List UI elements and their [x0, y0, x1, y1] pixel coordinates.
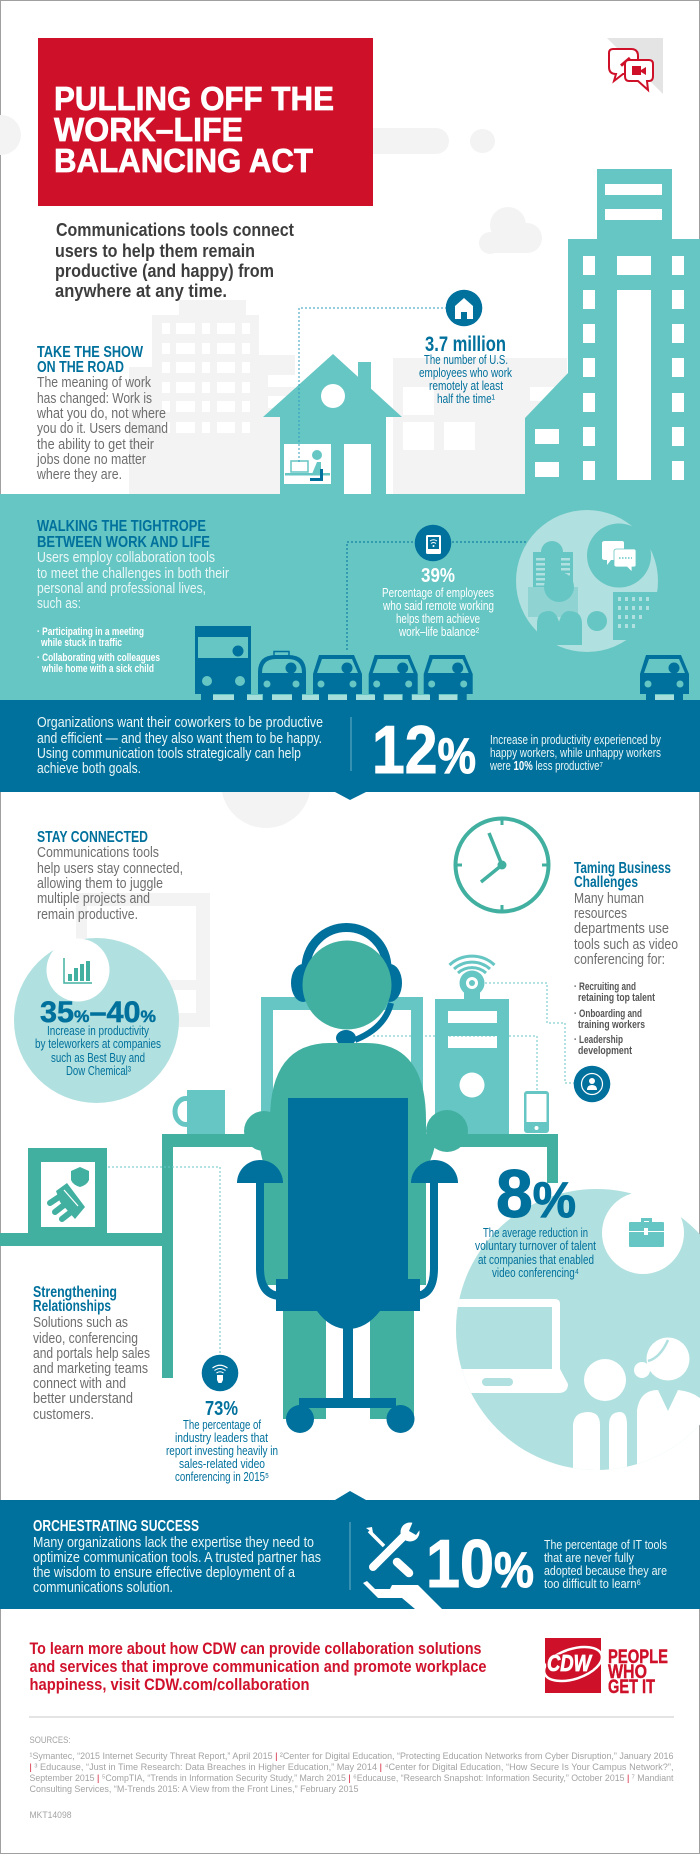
CDW logo [540, 1638, 668, 1698]
callout: 3.7 million remote employees: remotely at least [429, 378, 503, 393]
callout: 35 to 40 percent productivity circle [14, 938, 179, 1103]
panel: orchestrating success band: adopted because they are [544, 1563, 667, 1578]
dashed connectors from headset and webcam [373, 983, 574, 1090]
sources: September 2015 | ⁵CompTIA, “Trends in Information Security Study,” March 2015 | ⁶Educause, “Research Snapshot: Information Security,” October 2015 | ⁷ Mandiant [30, 1773, 674, 1784]
panel: orchestrating success band: that are never fully [544, 1550, 634, 1565]
callout: 39 percent work-life balance: helps them achieve [396, 611, 480, 626]
illustration: computer tower with webcam [435, 956, 509, 1134]
callout: 39 percent work-life balance [347, 525, 527, 650]
text: taming business challenges: Taming Business [574, 860, 671, 877]
callout: 39 percent work-life balance: Percentage of employees [382, 585, 494, 600]
text: taming business challenges: Many human [574, 890, 644, 907]
text: tightrope copy: while stuck in traffic [40, 637, 122, 649]
callout: 73 percent video conferencing: The percentage of [183, 1417, 261, 1432]
call to action [30, 1639, 486, 1694]
title box [38, 38, 373, 206]
house with remote worker [263, 354, 402, 494]
text: take the show on the road: you do it. Users demand [37, 420, 168, 437]
CDW logo: WHO [608, 1661, 647, 1683]
teal office building [525, 169, 700, 494]
callout: 3.7 million remote employees: 3.7 million [425, 333, 506, 356]
text: tightrope copy: BETWEEN WORK AND LIFE [37, 534, 210, 551]
panel: productivity band 12 percent [0, 700, 700, 800]
callout: 8 percent turnover reduction: The average reduction in [483, 1225, 588, 1240]
text: strengthening relationships: and marketing teams [33, 1360, 148, 1377]
text: taming business challenges: · Onboarding and [574, 1008, 642, 1020]
CDW logo: PEOPLE [608, 1646, 668, 1668]
text: tightrope copy: to meet the challenges in both their [37, 565, 229, 582]
callout: 35 to 40 percent productivity circle: Increase in productivity [47, 1023, 149, 1038]
intro statement [55, 219, 294, 301]
panel: productivity band 12 percent: and efficient — and they also want them to be happy. [37, 730, 322, 747]
callout: 73 percent video conferencing: sales-related video [179, 1456, 265, 1471]
text: taming business challenges: resources [574, 905, 627, 922]
intro statement: users to help them remain [55, 240, 255, 261]
call to action: To learn more about how CDW can provide collaboration solutions [30, 1639, 482, 1658]
text: taming business challenges: · Recruiting and [574, 981, 636, 993]
sources: ¹Symantec, “2015 Internet Security Threat Report,” April 2015 | ²Center for Digital Education, “Protecting Education Networks from Cyber Disruption,” January 2016 [30, 1751, 674, 1762]
panel: orchestrating success band: ORCHESTRATING SUCCESS [33, 1518, 199, 1535]
callout: 8 percent turnover reduction: video conferencing⁴ [492, 1265, 579, 1280]
panel: orchestrating success band: communications solution. [33, 1579, 173, 1596]
text: stay connected [37, 829, 183, 923]
callout: 3.7 million remote employees: half the time¹ [437, 391, 496, 406]
text: taming business challenges: tools such as video [574, 936, 678, 953]
CDW logo: CDW [547, 1650, 593, 1676]
text: strengthening relationships: Relationships [33, 1298, 111, 1315]
text: tightrope copy [37, 518, 229, 675]
panel: walking the tightrope [0, 494, 700, 700]
grey decorative circle [221, 738, 311, 828]
text: taming business challenges: training workers [578, 1019, 645, 1031]
text: take the show on the road: ON THE ROAD [37, 359, 124, 376]
text: stay connected: STAY CONNECTED [37, 829, 148, 846]
panel: orchestrating success band: the wisdom to ensure effective deployment of a [33, 1564, 296, 1581]
callout: 8 percent turnover reduction: voluntary turnover of talent [475, 1238, 596, 1253]
callout: 73 percent video conferencing: industry leaders that [175, 1430, 268, 1445]
icon: smartphone on desk [524, 1091, 549, 1133]
panel: productivity band 12 percent: were 10% less productive⁷ [489, 758, 603, 773]
panel: productivity band 12 percent: 12% [372, 712, 476, 788]
panel: orchestrating success band: too difficult to learn⁶ [544, 1576, 641, 1591]
text: strengthening relationships: better understand [33, 1390, 133, 1407]
callout: 35 to 40 percent productivity circle: by teleworkers at companies [35, 1036, 161, 1051]
title box: PULLING OFF THE [54, 80, 334, 117]
panel: orchestrating success band: 10% [426, 1526, 534, 1602]
illustration: circle with city, people and chat bubbles [516, 510, 658, 652]
icon: clock [456, 818, 548, 912]
callout: 73 percent video conferencing [108, 1167, 278, 1484]
text: take the show on the road [36, 344, 168, 483]
text: stay connected: multiple projects and [37, 890, 150, 907]
callout: 8 percent turnover reduction: at companies that enabled [478, 1252, 594, 1267]
icon: wrench, screwdriver and hand [363, 1519, 442, 1609]
callout: 73 percent video conferencing: conferencing in 2015⁵ [175, 1469, 269, 1484]
text: strengthening relationships: Solutions such as [33, 1314, 128, 1331]
text: taming business challenges: departments use [574, 920, 669, 937]
illustration: monitor [261, 997, 423, 1134]
text: tightrope copy: personal and professional lives, [37, 580, 206, 597]
sources: MKT14098 [30, 1810, 72, 1821]
call to action: and services that improve communication and promote workplace [30, 1657, 486, 1676]
sources: | ³ Educause, “Just in Time Research: Data Breaches in Higher Education,” May 2014 | ⁴Center for Digital Education, “How Secure Is Your Campus Network?”, [30, 1762, 674, 1773]
text: stay connected: remain productive. [37, 906, 138, 923]
text: strengthening relationships: customers. [33, 1406, 94, 1423]
callout: 39 percent work-life balance: 39% [421, 565, 455, 587]
sources: Consulting Services, “M-Trends 2015: A View from the Front Lines,” February 2015 [30, 1784, 358, 1795]
text: tightrope copy: · Participating in a meeting [37, 626, 144, 638]
illustration: person with headset seated in chair [237, 928, 468, 1433]
callout: 3.7 million remote employees: The number of U.S. [424, 352, 508, 367]
sources: SOURCES: [30, 1735, 70, 1746]
decorative clouds and grey skyline [0, 115, 567, 494]
text: take the show on the road: has changed: Work is [37, 390, 152, 407]
panel: productivity band 12 percent: achieve both goals. [37, 760, 141, 777]
illustration: desk and shelf [0, 1134, 558, 1378]
illustration: traffic of bus, taxi and cars [195, 626, 689, 700]
text: take the show on the road: where they are. [36, 466, 122, 483]
text: take the show on the road: the ability to get their [37, 436, 154, 453]
callout: 39 percent work-life balance: who said remote working [382, 598, 494, 613]
decorative grey frame behind text [76, 893, 210, 1027]
text: taming business challenges: · Leadership [574, 1034, 623, 1046]
call to action: happiness, visit CDW.com/collaboration [30, 1675, 310, 1694]
text: take the show on the road: what you do, not where [36, 405, 166, 422]
text: strengthening relationships: connect with and [33, 1375, 126, 1392]
text: taming business challenges: retaining top talent [578, 992, 655, 1004]
callout: 3.7 million remote employees [299, 290, 512, 462]
panel: orchestrating success band [0, 1491, 700, 1609]
text: tightrope copy: WALKING THE TIGHTROPE [37, 518, 206, 535]
panel: productivity band 12 percent: Using communication tools strategically can help [37, 745, 301, 762]
text: tightrope copy: such as: [37, 595, 81, 612]
text: tightrope copy: · Collaborating with colleagues [37, 652, 160, 664]
icon: coffee mug [175, 1090, 225, 1134]
callout: 73 percent video conferencing: report investing heavily in [166, 1443, 278, 1458]
text: strengthening relationships: video, conferencing [33, 1330, 138, 1347]
text: strengthening relationships [33, 1284, 150, 1423]
text: take the show on the road: The meaning of work [37, 374, 151, 391]
text: taming business challenges [574, 860, 678, 1057]
text: taming business challenges: development [578, 1045, 632, 1057]
text: take the show on the road: jobs done no matter [36, 451, 146, 468]
panel: orchestrating success band: Many organizations lack the expertise they need to [33, 1534, 314, 1551]
text: taming business challenges: Challenges [574, 874, 638, 891]
callout: 8 percent turnover reduction: 8% [496, 1156, 576, 1232]
icon: human resources person badge [574, 1066, 610, 1102]
text: tightrope copy: Users employ collaboration tools [37, 549, 215, 566]
panel: orchestrating success band: optimize communication tools. A trusted partner has [33, 1549, 321, 1566]
icon: chat bubbles with phone and video [607, 38, 663, 94]
CDW logo: GET IT [608, 1676, 655, 1698]
intro statement: anywhere at any time. [55, 280, 227, 301]
text: taming business challenges: conferencing for: [574, 951, 665, 968]
callout: 35 to 40 percent productivity circle: such as Best Buy and [51, 1050, 145, 1065]
illustration: large circle with laptop and people [440, 1189, 700, 1480]
illustration: framed handshake picture [28, 1148, 107, 1233]
intro statement: productive (and happy) from [55, 260, 274, 281]
callout: 3.7 million remote employees: employees who work [419, 365, 512, 380]
text: stay connected: help users stay connected, [37, 860, 183, 877]
panel: productivity band 12 percent: Organizations want their coworkers to be productive [37, 714, 323, 731]
title box: BALANCING ACT [54, 142, 313, 179]
callout: 35 to 40 percent productivity circle: Dow Chemical³ [66, 1063, 131, 1078]
callout: 39 percent work-life balance: work–life balance² [398, 624, 480, 639]
sources [30, 1735, 674, 1821]
intro statement: Communications tools connect [56, 219, 294, 240]
text: strengthening relationships: and portals help sales [33, 1345, 150, 1362]
text: take the show on the road: TAKE THE SHOW [37, 344, 143, 361]
callout: 35 to 40 percent productivity circle: 35%–40% [40, 996, 156, 1029]
text: stay connected: allowing them to juggle [37, 875, 163, 892]
text: stay connected: Communications tools [37, 844, 159, 861]
grey building windows [162, 323, 555, 450]
title box: WORK–LIFE [54, 111, 243, 148]
panel: orchestrating success band: The percentage of IT tools [544, 1537, 667, 1552]
text: tightrope copy: while home with a sick child [41, 663, 154, 675]
callout: 8 percent turnover reduction [475, 1156, 596, 1280]
callout: 73 percent video conferencing: 73% [205, 1398, 238, 1420]
text: strengthening relationships: Strengthening [33, 1284, 117, 1301]
